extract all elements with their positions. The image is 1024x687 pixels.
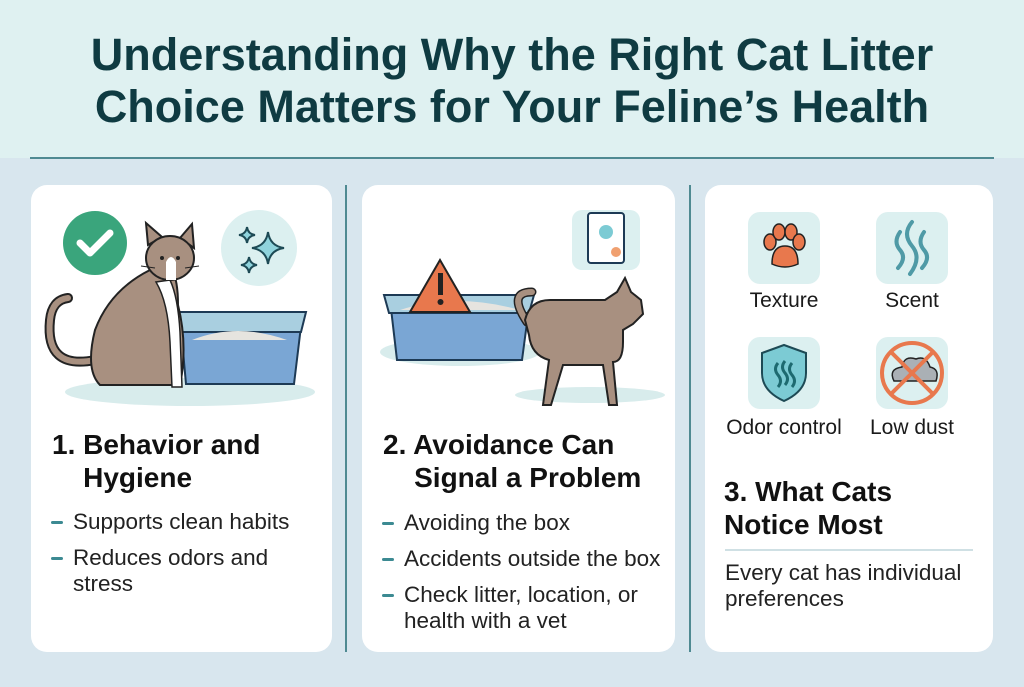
- illustration: cat leaving box: [380, 210, 665, 406]
- bullet list: Accidents outside the box: [404, 546, 660, 571]
- bullet list: Supports clean habits: [73, 509, 289, 534]
- illustration: cat with litter box: [44, 210, 315, 406]
- heading: 2. Avoidance Can: [383, 429, 614, 460]
- panel: what cats notice: [705, 185, 993, 652]
- icon: scent: [876, 212, 948, 284]
- bullet list: [51, 509, 289, 596]
- label: Odor control: [726, 416, 842, 439]
- icon: odor control: [748, 337, 820, 409]
- panel: behavior and hygiene: [31, 185, 332, 652]
- heading: 1. Behavior and: [52, 429, 261, 460]
- heading: [724, 476, 892, 540]
- icon: texture: [748, 212, 820, 284]
- title: Choice Matters for Your Feline’s Health: [95, 81, 929, 132]
- label: Low dust: [870, 416, 954, 439]
- bullet list: [382, 510, 660, 633]
- heading: Notice Most: [724, 509, 883, 540]
- label: Scent: [885, 289, 939, 312]
- heading: [52, 429, 261, 493]
- icon: low dust: [876, 337, 948, 409]
- bullet list: Check litter, location, or health with a vet: [404, 582, 638, 633]
- header: [0, 0, 1024, 158]
- label: Texture: [750, 289, 818, 312]
- text block: Every cat has individual preferences: [725, 560, 961, 611]
- heading: [383, 429, 641, 493]
- bullet list: Avoiding the box: [404, 510, 570, 535]
- title: Understanding Why the Right Cat Litter: [91, 29, 933, 80]
- heading: Hygiene: [83, 462, 192, 493]
- heading: 3. What Cats: [724, 476, 892, 507]
- heading: Signal a Problem: [414, 462, 641, 493]
- panel: avoidance: [362, 185, 675, 652]
- bullet list: Reduces odors and stress: [73, 545, 268, 596]
- title: [91, 29, 933, 132]
